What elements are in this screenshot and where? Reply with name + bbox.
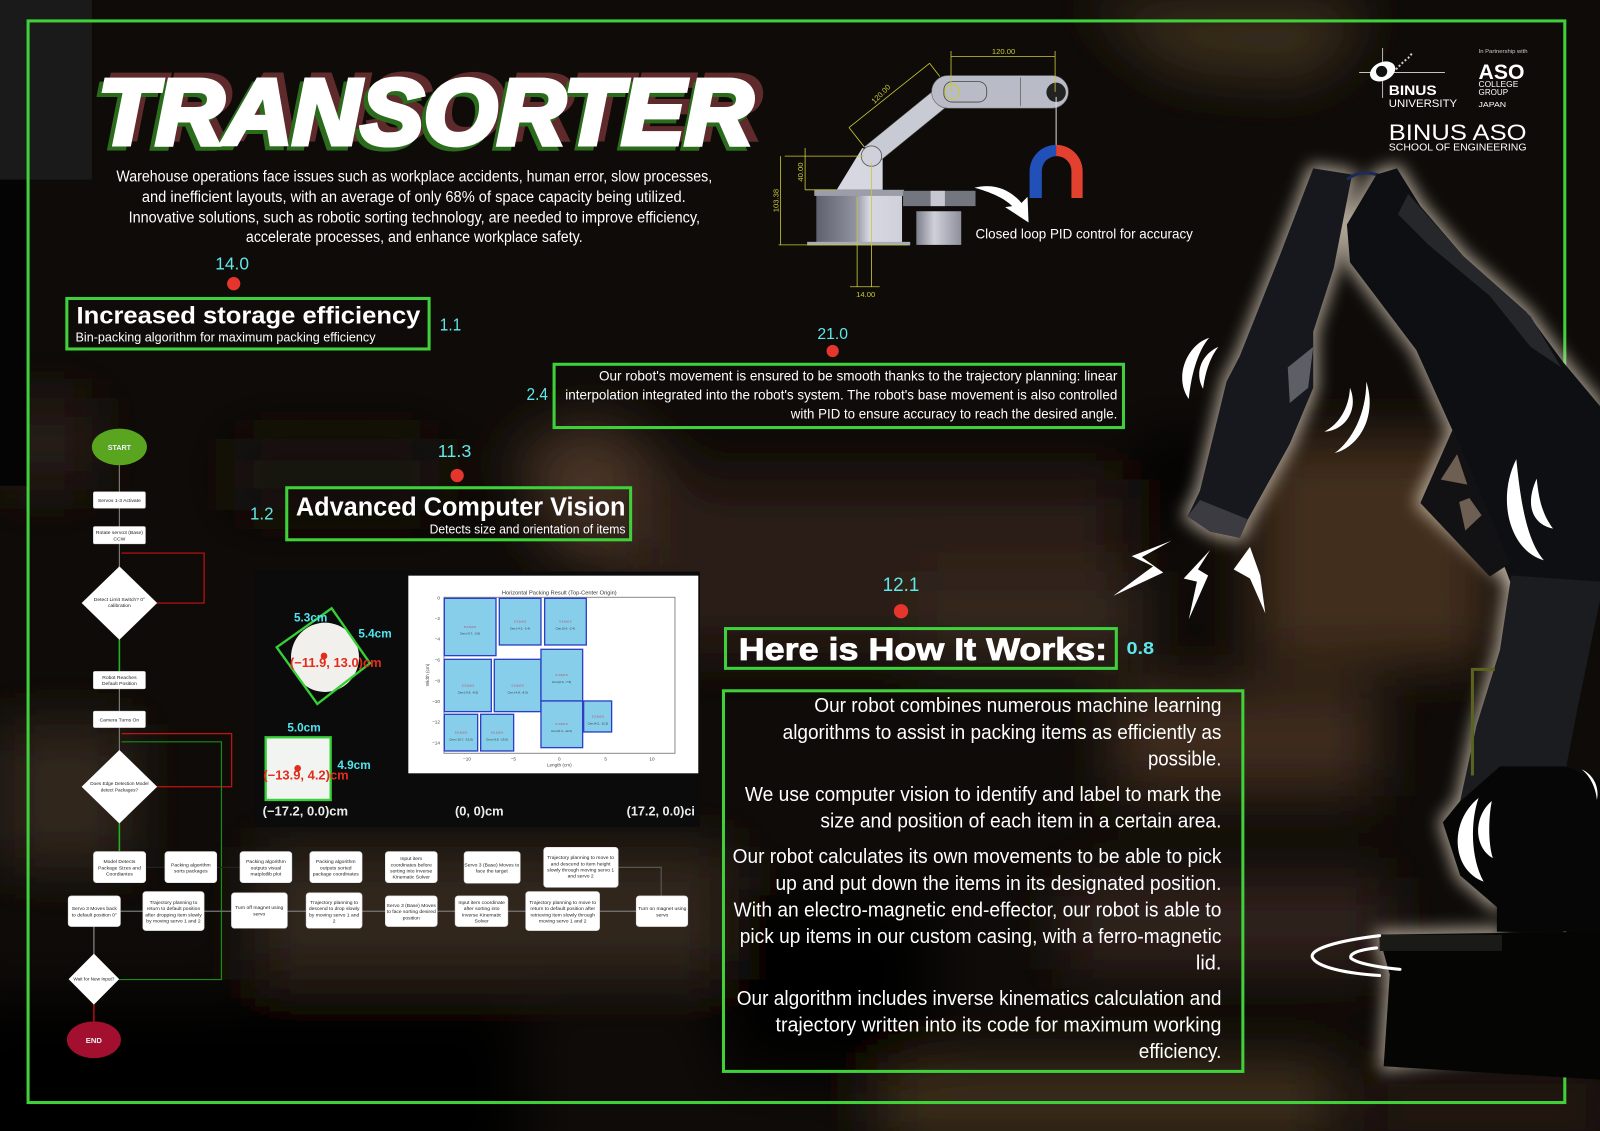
square package detection xyxy=(263,721,371,800)
logos xyxy=(1359,48,1528,154)
decision: edge detection: detect Packages? xyxy=(101,787,138,792)
logo: BINUS University: BINUS xyxy=(1389,83,1437,99)
intro text: accelerate processes, and enhance workplace safety. xyxy=(246,229,583,246)
paragraph 2: We use computer vision to identify and label to mark the xyxy=(745,784,1221,806)
trajectory return: return to default position after xyxy=(530,906,596,912)
swoosh: base rotation xyxy=(1312,936,1400,975)
description: Our robot's movement is ensured to be smooth thanks to the trajectory planning: linear xyxy=(599,369,1118,384)
base cylinder xyxy=(807,190,910,245)
step: servos activate: Servos 1-3 Activate xyxy=(98,498,141,504)
square package detection: 5.0cm xyxy=(287,721,321,735)
paragraph 1: possible. xyxy=(1148,748,1221,770)
end node xyxy=(67,1021,121,1058)
axis labels: −10 xyxy=(463,756,471,761)
sorted coordinates: package coordinates xyxy=(313,871,359,877)
axis labels: −2 xyxy=(435,616,440,621)
base faces sorting: position xyxy=(403,915,420,921)
trajectory return after drop: Trajectory planning to xyxy=(150,900,197,906)
trajectory return: Trajectory planning to move to xyxy=(529,900,596,906)
value 1.1: 1.1 xyxy=(440,315,461,335)
axis labels: −6 xyxy=(435,658,440,663)
packed boxes: Cen:(0.3, -12.2) xyxy=(551,729,572,733)
upper link xyxy=(864,89,946,161)
decision: limit switch: calibration xyxy=(108,603,131,609)
origin coordinates xyxy=(263,805,695,819)
heading: Advanced Computer Vision xyxy=(296,493,626,521)
intro text: and inefficient layouts, with an average of only 68% of space capacity being utilized. xyxy=(142,189,686,206)
round package detection: 5.3cm xyxy=(294,611,327,625)
packed boxes: 5.4,5x0.5 xyxy=(555,722,568,726)
red dot xyxy=(894,604,908,618)
value 2.4: 2.4 xyxy=(527,384,548,404)
sorts packages: Packing algorithm xyxy=(171,862,211,868)
model detects: Coordiantes xyxy=(106,871,133,877)
red dot xyxy=(827,345,839,357)
packed boxes: 5.0,5x0.5 xyxy=(455,730,467,734)
round package detection: 5.4cm xyxy=(358,626,392,640)
subheading: Detects size and orientation of items xyxy=(430,522,626,537)
title white: TRANSORTER xyxy=(98,60,753,164)
axis labels: −12 xyxy=(432,720,440,725)
logo: ASO College Group: ASO xyxy=(1479,60,1524,84)
magnet off: servo xyxy=(253,911,266,917)
truss bracket xyxy=(1420,429,1510,577)
logo: ASO College Group: COLLEGE xyxy=(1479,79,1519,89)
heading: Here is How It Works: xyxy=(739,631,1107,667)
step: rotate servo: Rotate servo3 (Base) xyxy=(96,530,143,536)
trajectory return after drop xyxy=(143,892,204,931)
dimension values: 120.00 xyxy=(992,47,1015,56)
trajectory descend item: and descend to item height xyxy=(551,861,611,867)
logo: BINUS ASO School of Engineering xyxy=(1389,120,1527,154)
paragraph 1 xyxy=(783,695,1221,770)
packed boxes: Cen:(-4.3, -2.4) xyxy=(510,626,530,630)
camera backdrop xyxy=(254,572,700,827)
axis labels: 0 xyxy=(437,595,440,600)
box xyxy=(67,298,429,349)
step: camera on xyxy=(93,711,145,728)
packed boxes: 5.4,5x0.5 xyxy=(559,619,572,623)
axes xyxy=(444,597,675,753)
round package detection xyxy=(277,608,392,704)
paragraph 3: With an electro-magnetic end-effector, our robot is able to xyxy=(734,899,1221,921)
magnet on xyxy=(636,896,688,927)
paragraph 3: pick up items in our custom casing, with a ferro-magnetic xyxy=(740,926,1221,948)
end effector xyxy=(1188,500,1248,538)
axis labels: −4 xyxy=(435,637,440,642)
trajectory return after drop: after dropping item slowly xyxy=(145,912,202,918)
shoulder joint xyxy=(861,146,882,166)
end node: END xyxy=(86,1036,102,1045)
axis labels xyxy=(425,595,655,768)
step: servos activate xyxy=(93,492,145,508)
origin coordinates: (17.2, 0.0)ci xyxy=(627,805,695,819)
callout: storage efficiency xyxy=(67,253,461,349)
paragraph 4: trajectory written into its code for maximum working xyxy=(776,1015,1221,1037)
trajectory descend item: and servo 2 xyxy=(568,874,594,880)
packed boxes: Cen:(0.4, -2.4) xyxy=(556,626,575,630)
string xyxy=(1055,97,1057,146)
robot arm photo xyxy=(1113,168,1600,1080)
square package detection: (−13.9, 4.2)cm xyxy=(263,769,349,783)
axis labels: Width (cm) xyxy=(425,663,430,686)
step: default position xyxy=(93,671,145,689)
logo: BINUS ASO School of Engineering: SCHOOL OF ENGINEERING xyxy=(1389,143,1527,154)
trajectory descend item xyxy=(544,847,618,887)
callout: trajectory planning xyxy=(527,326,1123,428)
paragraph 3: lid. xyxy=(1196,952,1221,974)
axis labels: Length (cm) xyxy=(547,763,572,768)
base faces target: face the target xyxy=(476,868,508,874)
packed boxes: Cen:(-6.8, -13.0) xyxy=(486,737,508,741)
step row 1 xyxy=(93,847,618,887)
dimension values: 120.00 xyxy=(870,83,892,105)
model detects: Model Detects xyxy=(103,859,135,865)
input after sorting: Solver xyxy=(475,918,489,924)
axis labels: −10 xyxy=(432,699,440,704)
input after sorting: Inverse Kinematic xyxy=(462,912,502,918)
step: default position: Robot Reaches xyxy=(102,675,137,681)
axis labels: 5 xyxy=(604,756,607,761)
section heading: how it works xyxy=(726,574,1154,668)
paragraph 1: Our robot combines numerous machine learning xyxy=(814,695,1221,717)
base faces target: Servo 3 (Base) Moves to xyxy=(464,862,519,868)
arrow xyxy=(974,186,1029,222)
box xyxy=(723,691,1243,1071)
trajectory descend drop: Trajectory planning to xyxy=(310,900,358,906)
packed boxes: Cen:(0.3, -7.5) xyxy=(552,680,571,684)
forearm highlight xyxy=(1288,347,1313,403)
trajectory descend item: Trajectory planning to move to xyxy=(547,855,614,861)
packed boxes: Cen:(-4.8, -8.3) xyxy=(508,690,528,694)
input before sorting: sorting into Inverse xyxy=(390,868,433,874)
packed boxes: Cen:(-9.7, -2.9) xyxy=(460,632,480,636)
square package detection: 4.9cm xyxy=(337,758,371,772)
packing plot xyxy=(408,576,698,773)
step: rotate servo: CCW xyxy=(113,536,126,542)
logo: ASO College Group: In Partnership with xyxy=(1479,49,1528,55)
intro text: Warehouse operations face issues such as workplace accidents, human error, slow processes, xyxy=(116,169,712,186)
box xyxy=(554,364,1123,428)
forearm xyxy=(932,76,1068,108)
plot title: Horizontal Packing Result (Top-Center Origin) xyxy=(502,590,617,596)
packed boxes: 5.5,5x0.5 xyxy=(512,683,524,687)
box xyxy=(726,629,1116,668)
trajectory return xyxy=(526,892,600,931)
step: camera on: Camera Turns On xyxy=(100,717,139,723)
heading: Increased storage efficiency xyxy=(77,302,421,329)
visual plot: matplotlib plot xyxy=(251,871,282,877)
value 1.2: 1.2 xyxy=(250,503,273,523)
title xyxy=(93,55,761,168)
logo: ASO College Group: JAPAN xyxy=(1479,100,1506,109)
upper arm tape xyxy=(1398,194,1561,367)
origin coordinates: (0, 0)cm xyxy=(455,805,504,819)
packed boxes: 5.4,5x0.5 xyxy=(514,619,526,623)
logo: BINUS University: UNIVERSITY xyxy=(1389,98,1458,110)
decision: wait for input: Wait for New Input? xyxy=(73,977,115,982)
logo: ASO College Group xyxy=(1479,49,1528,109)
dimension values: 103.38 xyxy=(772,189,781,212)
start node xyxy=(92,429,147,465)
base faces sorting: to face sorting desired xyxy=(387,909,436,915)
dimension values xyxy=(772,47,1015,299)
base faces sorting xyxy=(385,896,437,927)
trajectory descend drop: descend to drop slowly xyxy=(309,906,360,912)
axis labels: −14 xyxy=(432,740,440,745)
robot glow xyxy=(1188,168,1600,1066)
trajectory return: moving servo 1 and 2 xyxy=(539,918,587,924)
description: with PID to ensure accuracy to reach the desired angle. xyxy=(790,406,1117,421)
trajectory return after drop: by moving servo 1 and 2 xyxy=(146,918,201,924)
input before sorting xyxy=(385,852,437,883)
magnet off: Turn off magnet using xyxy=(235,905,283,911)
sorted coordinates: Packing algorithm xyxy=(316,859,356,865)
red dot xyxy=(451,469,464,482)
flowchart xyxy=(67,429,688,1058)
paragraph 3: Our robot calculates its own movements to be able to pick xyxy=(733,846,1222,868)
magnet off xyxy=(231,893,287,928)
step row 2 xyxy=(68,892,688,931)
input after sorting: Input item coordinate xyxy=(458,900,505,906)
packed boxes: 5.2,5x0.5 xyxy=(592,714,604,718)
axis labels: −8 xyxy=(435,678,440,683)
paragraph 4: efficiency. xyxy=(1139,1041,1221,1063)
intro text: Innovative solutions, such as robotic sorting technology, are needed to improve efficiency, xyxy=(129,209,700,226)
paragraph 2: size and position of each item in a certain area. xyxy=(820,811,1221,833)
sorts packages: sorts packages xyxy=(174,868,208,874)
packed boxes: Cen:(-10.7, -13.0) xyxy=(449,737,473,741)
sorts packages xyxy=(165,852,217,883)
base faces target xyxy=(464,852,520,883)
swoosh: shoulder motion xyxy=(1458,769,1598,882)
visual plot xyxy=(240,852,292,883)
visual plot: outputs visual xyxy=(251,865,281,871)
packed boxes: 5.5,5x0.5 xyxy=(462,683,474,687)
step: default position: Default Position xyxy=(102,681,137,687)
decision: limit switch: Detect Limit Switch? 0° xyxy=(94,597,145,603)
intro text xyxy=(116,169,712,246)
servo back: Servo 3 Moves back xyxy=(72,906,117,912)
forearm xyxy=(1188,168,1352,538)
decision: wait for input xyxy=(69,954,119,1005)
upper arm xyxy=(1347,168,1600,582)
swoosh: forearm motion left xyxy=(1182,338,1218,399)
packed boxes: 5.5,5x0.5 xyxy=(464,625,476,629)
model detects: Package Sizes and xyxy=(98,865,141,871)
logo: ASO College Group: GROUP xyxy=(1479,87,1508,97)
caption: Closed loop PID control for accuracy xyxy=(976,226,1194,242)
packed boxes: Cen:(-9.9, -8.3) xyxy=(458,690,478,694)
title shadow maroon: TRANSORTER xyxy=(104,55,761,159)
red dot xyxy=(227,277,240,290)
input before sorting: coordinates before xyxy=(391,862,432,868)
trajectory descend item: slowly through moving servo 1 xyxy=(547,867,614,873)
description: interpolation integrated into the robot's system. The robot's base movement is also controlled xyxy=(565,387,1117,402)
sorted coordinates xyxy=(310,852,362,883)
axis labels: −5 xyxy=(511,756,516,761)
decision: edge detection xyxy=(82,750,157,823)
packed boxes xyxy=(444,598,612,751)
shoulder mount xyxy=(837,148,883,190)
input after sorting xyxy=(455,896,508,927)
base faces sorting: Servo 3 (Base) Moves xyxy=(387,903,436,909)
box xyxy=(287,488,631,540)
packed boxes: 5.0,5x0.5 xyxy=(491,730,503,734)
value 11.3: 11.3 xyxy=(438,441,471,461)
model detects xyxy=(93,852,146,883)
start node: START xyxy=(108,444,132,452)
input after sorting: after sorting into xyxy=(464,906,500,912)
visual plot: Packing algorithm xyxy=(246,859,286,865)
round package detection: (−11.9, 13.0)cm xyxy=(290,656,382,670)
trajectory return: retrieving item slowly through xyxy=(530,912,595,918)
decision: limit switch xyxy=(82,566,157,640)
subheading: Bin-packing algorithm for maximum packing efficiency xyxy=(76,329,376,344)
trajectory descend drop: 2 xyxy=(333,918,336,924)
side block xyxy=(903,191,976,245)
magnet on: Turn on magnet using xyxy=(638,906,686,912)
paragraph 2 xyxy=(745,784,1221,833)
paragraph 4 xyxy=(737,988,1221,1063)
base xyxy=(1379,932,1600,1080)
input before sorting: Input item xyxy=(400,856,422,862)
title shadow green: TRANSORTER xyxy=(93,64,750,168)
dimension values: 14.00 xyxy=(856,290,875,299)
dimension values: 40.00 xyxy=(796,163,805,182)
servo back: to default position 0° xyxy=(72,912,117,918)
logo: BINUS University xyxy=(1359,48,1458,110)
value 12.1: 12.1 xyxy=(883,574,919,596)
icon: magnet xyxy=(1030,145,1083,198)
icon: magnetic sparks xyxy=(1113,541,1265,619)
swoosh: forearm motion right xyxy=(1324,382,1370,453)
shoulder joint xyxy=(1443,766,1600,932)
lower link xyxy=(1460,575,1600,801)
paragraph 3 xyxy=(733,846,1222,974)
connectors xyxy=(94,464,661,1021)
trajectory descend drop xyxy=(306,893,362,928)
value 21.0: 21.0 xyxy=(817,326,848,343)
trajectory descend drop: by moving servo 1 and xyxy=(309,912,359,918)
paragraph 1: algorithms to assist in packing items as efficiently as xyxy=(783,722,1221,744)
panel: vision and packing result image xyxy=(254,572,700,827)
paragraph 3: up and put down the items in its designated position. xyxy=(776,873,1221,895)
sorted coordinates: outputs sorted xyxy=(320,865,352,871)
axis labels: 10 xyxy=(649,756,655,761)
step: rotate servo xyxy=(93,527,145,544)
logo: BINUS ASO School of Engineering: BINUS ASO xyxy=(1389,120,1527,145)
value 0.8: 0.8 xyxy=(1127,638,1154,658)
callout: computer vision xyxy=(250,441,631,540)
packed boxes: 5.4,5x0.5 xyxy=(555,673,568,677)
packed boxes: Cen:(4.2, -11.5) xyxy=(588,721,608,725)
origin coordinates: (−17.2, 0.0)cm xyxy=(263,805,348,819)
dimension lines xyxy=(779,51,1055,287)
description xyxy=(565,369,1118,421)
CAD robot drawing xyxy=(772,47,1194,299)
trajectory return after drop: return to default position xyxy=(147,906,200,912)
paragraph 4: Our algorithm includes inverse kinematics calculation and xyxy=(737,988,1221,1010)
swoosh: elbow motion xyxy=(1507,459,1553,560)
panel: how it works description xyxy=(723,691,1243,1071)
base gear rim xyxy=(1380,935,1502,951)
servo back xyxy=(68,896,120,927)
green bracket xyxy=(1472,669,1495,775)
magnet on: servo xyxy=(656,912,669,918)
axis labels: 0 xyxy=(558,756,561,761)
value 14.0: 14.0 xyxy=(215,253,249,273)
input before sorting: Kinematic Solver xyxy=(393,875,430,881)
wrist wire xyxy=(1347,173,1380,180)
decision: edge detection: Does Edge Detection Model xyxy=(90,781,149,786)
